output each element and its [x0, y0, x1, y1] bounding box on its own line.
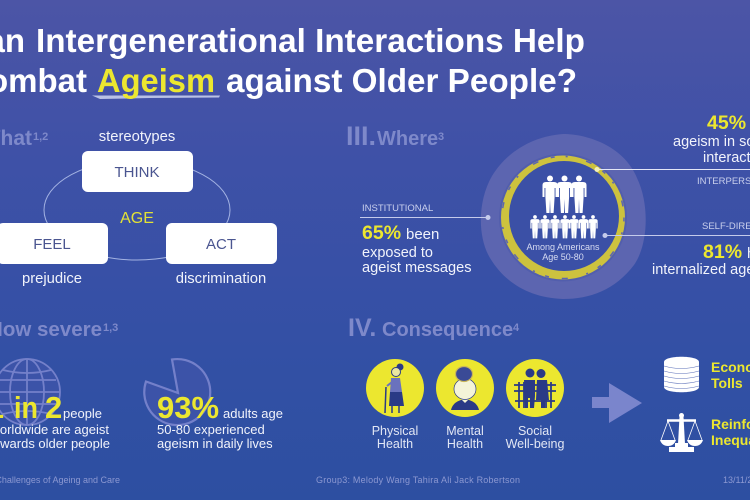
title — [0, 22, 585, 99]
text: economic tolls — [711, 359, 750, 391]
circle diagram: Americans 50-80: Age 50-80 — [542, 252, 584, 262]
text: economic tolls: Tolls — [711, 375, 743, 391]
icon: globe — [0, 359, 60, 425]
icon: seven small figures — [530, 215, 598, 238]
labels: health impact: Well-being — [506, 437, 564, 451]
callout: institutional: been — [406, 226, 439, 243]
callout: interpersonal — [594, 112, 750, 187]
callout: self-directed: 81% — [703, 241, 742, 263]
labels: health impact: Health — [447, 437, 483, 451]
box: feel — [0, 223, 108, 264]
box: think: THINK — [114, 164, 160, 181]
diagram: think feel act cycle: discrimination — [176, 271, 266, 287]
stat: 93%: ageism in daily lives — [157, 436, 273, 451]
icon: mental health — [436, 359, 494, 417]
arrow — [592, 383, 642, 423]
title: against Older People? — [226, 62, 577, 99]
labels: health impact — [372, 424, 564, 451]
callout: institutional — [360, 203, 490, 276]
stat: 1 in 2: people — [63, 406, 102, 421]
circle diagram: Americans 50-80 — [481, 134, 646, 299]
footer: group members: Group3: Melody Wang Tahira Ali Jack Robertson — [316, 475, 520, 485]
section heading: Where: Where — [377, 128, 438, 150]
icon: stack of coins — [664, 357, 699, 392]
section heading: Where: 3 — [438, 131, 444, 143]
section heading: Consequence: IV. — [348, 314, 376, 342]
callout: self-directed — [602, 221, 750, 278]
labels: health impact: Social — [518, 424, 552, 438]
callout: institutional: 65% — [362, 222, 401, 244]
diagram: think feel act cycle: stereotypes — [99, 129, 175, 145]
heading citation: 1,3 — [103, 322, 118, 334]
stat: 1 in 2 — [0, 390, 110, 451]
diagram: think feel act cycle: prejudice — [22, 271, 82, 287]
title: Intergenerational Interactions Help — [36, 22, 585, 59]
icon: pie chart — [144, 359, 210, 425]
labels: health impact: Physical — [372, 424, 418, 438]
box: act: ACT — [206, 236, 236, 253]
stat: 1 in 2: in — [14, 390, 38, 425]
icon: physical health — [366, 359, 424, 417]
labels: health impact: Health — [377, 437, 413, 451]
callout: institutional: INSTITUTIONAL — [362, 203, 433, 214]
icon: three adult figures — [542, 176, 586, 213]
stat: 93%: adults age — [223, 406, 283, 421]
section heading: Consequence: 4 — [513, 322, 520, 334]
stat: 93% — [157, 390, 283, 451]
box: think — [82, 151, 193, 192]
box: act — [166, 223, 277, 264]
labels: health impact: Mental — [446, 424, 484, 438]
callout: institutional: ageist messages — [362, 260, 472, 276]
callout: interpersonal: 45% — [707, 112, 746, 134]
diagram: think feel act cycle: AGE — [120, 210, 154, 227]
circle diagram: Americans 50-80: Among Americans — [526, 242, 600, 252]
diagram: think feel act cycle — [0, 129, 277, 287]
section heading: Consequence — [348, 314, 520, 342]
section heading: Where: III. — [346, 121, 376, 151]
callout: institutional: exposed to — [362, 245, 433, 261]
stat: 93%: 50-80 experienced — [157, 422, 265, 437]
stat: 93%: 93% — [157, 390, 219, 425]
icon: balance scale — [660, 413, 703, 452]
highlighted word: Ageism: Ageism — [97, 62, 215, 99]
heading citation: 1,2 — [33, 131, 48, 143]
text: reinforced inequality — [711, 416, 750, 448]
stat: 1 in 2: 2 — [45, 390, 62, 425]
icon: social well-being — [506, 359, 564, 417]
section heading: Where — [346, 121, 444, 151]
box: feel: FEEL — [33, 236, 71, 253]
section heading: Consequence: Consequence — [382, 319, 513, 341]
